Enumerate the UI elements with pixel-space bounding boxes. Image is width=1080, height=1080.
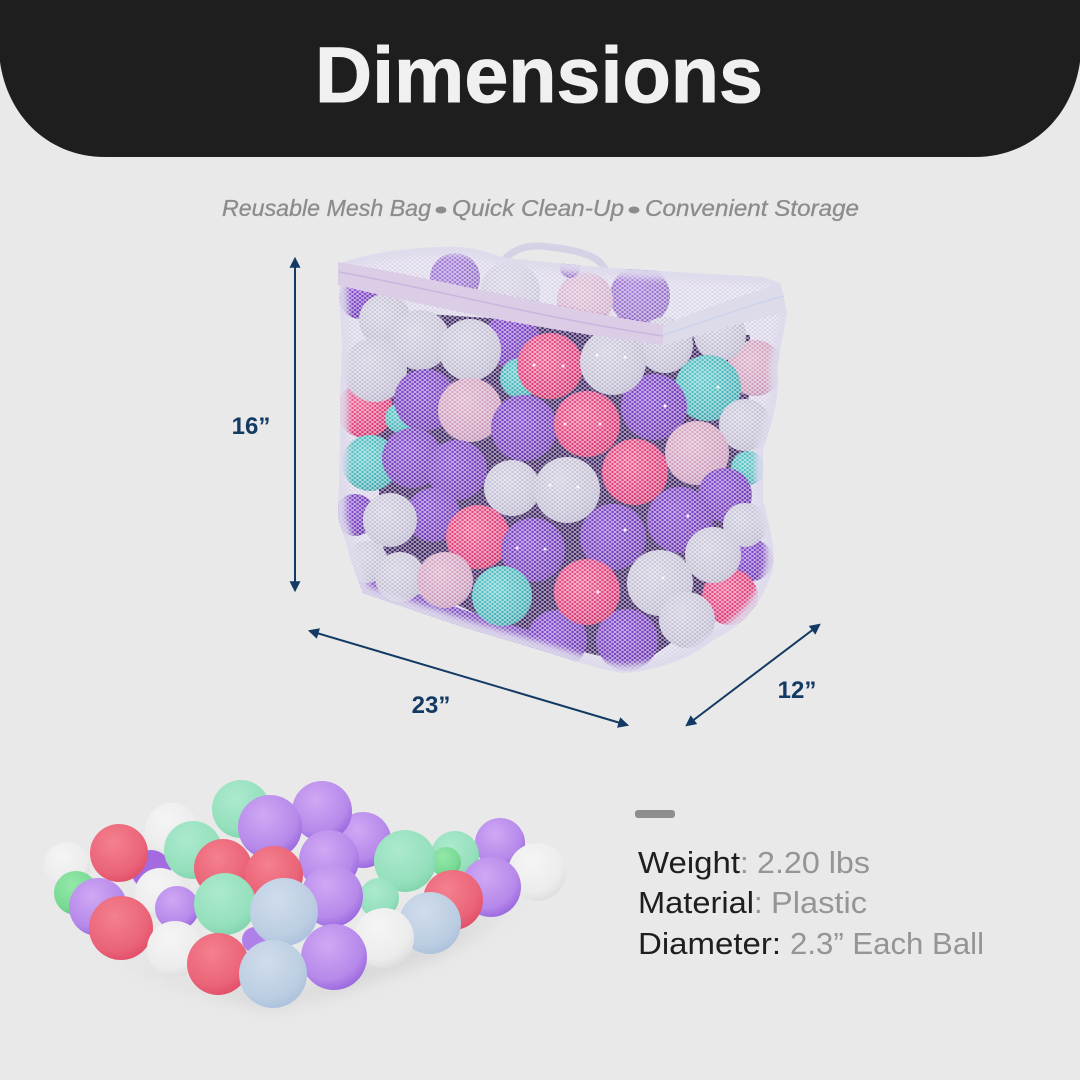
- arrow: width: [310, 631, 627, 725]
- label: 23 inches: 23”: [412, 692, 450, 719]
- loose balls pile: [44, 780, 566, 1008]
- material: Plastic: [771, 885, 867, 920]
- purple fold at bag bottom: [355, 572, 545, 652]
- specs text block: [638, 845, 984, 961]
- label: 12 inches: 12”: [778, 677, 816, 704]
- header banner: [0, 0, 1080, 157]
- dark gaps behind balls: [365, 310, 750, 665]
- balls inside bag: [330, 240, 795, 680]
- lid fabric tint: [430, 253, 674, 324]
- zipper band: [338, 262, 663, 345]
- diameter: [638, 926, 984, 961]
- material: [638, 885, 867, 920]
- diameter: Diameter:: [638, 926, 781, 961]
- pile shadow: [100, 905, 520, 1008]
- diameter: 2.3” Each Ball: [790, 926, 984, 961]
- subtitle: Convenient Storage: [645, 195, 859, 221]
- subtitle: Quick Clean-Up: [452, 195, 624, 221]
- label: 16 inches: 16”: [232, 413, 270, 440]
- material: Material: [638, 885, 754, 920]
- weight: :: [740, 845, 749, 880]
- arrow: depth: [687, 625, 819, 725]
- weight: 2.20 lbs: [757, 845, 870, 880]
- soft bag edge: [338, 247, 787, 673]
- subtitle: [222, 195, 859, 221]
- accent dash: [635, 810, 675, 818]
- weight: Weight: [638, 845, 740, 880]
- bag body: [338, 247, 787, 673]
- title: Dimensions: [315, 30, 763, 119]
- mesh netting: [346, 256, 766, 666]
- subtitle: Reusable Mesh Bag: [222, 195, 431, 221]
- mesh bag of balls: [330, 240, 795, 680]
- material: :: [754, 885, 763, 920]
- weight: [638, 845, 870, 880]
- bag handle: [505, 246, 606, 270]
- bag lid right edge: [663, 283, 787, 345]
- arrow: height: [294, 259, 296, 590]
- ball highlights: [516, 354, 720, 594]
